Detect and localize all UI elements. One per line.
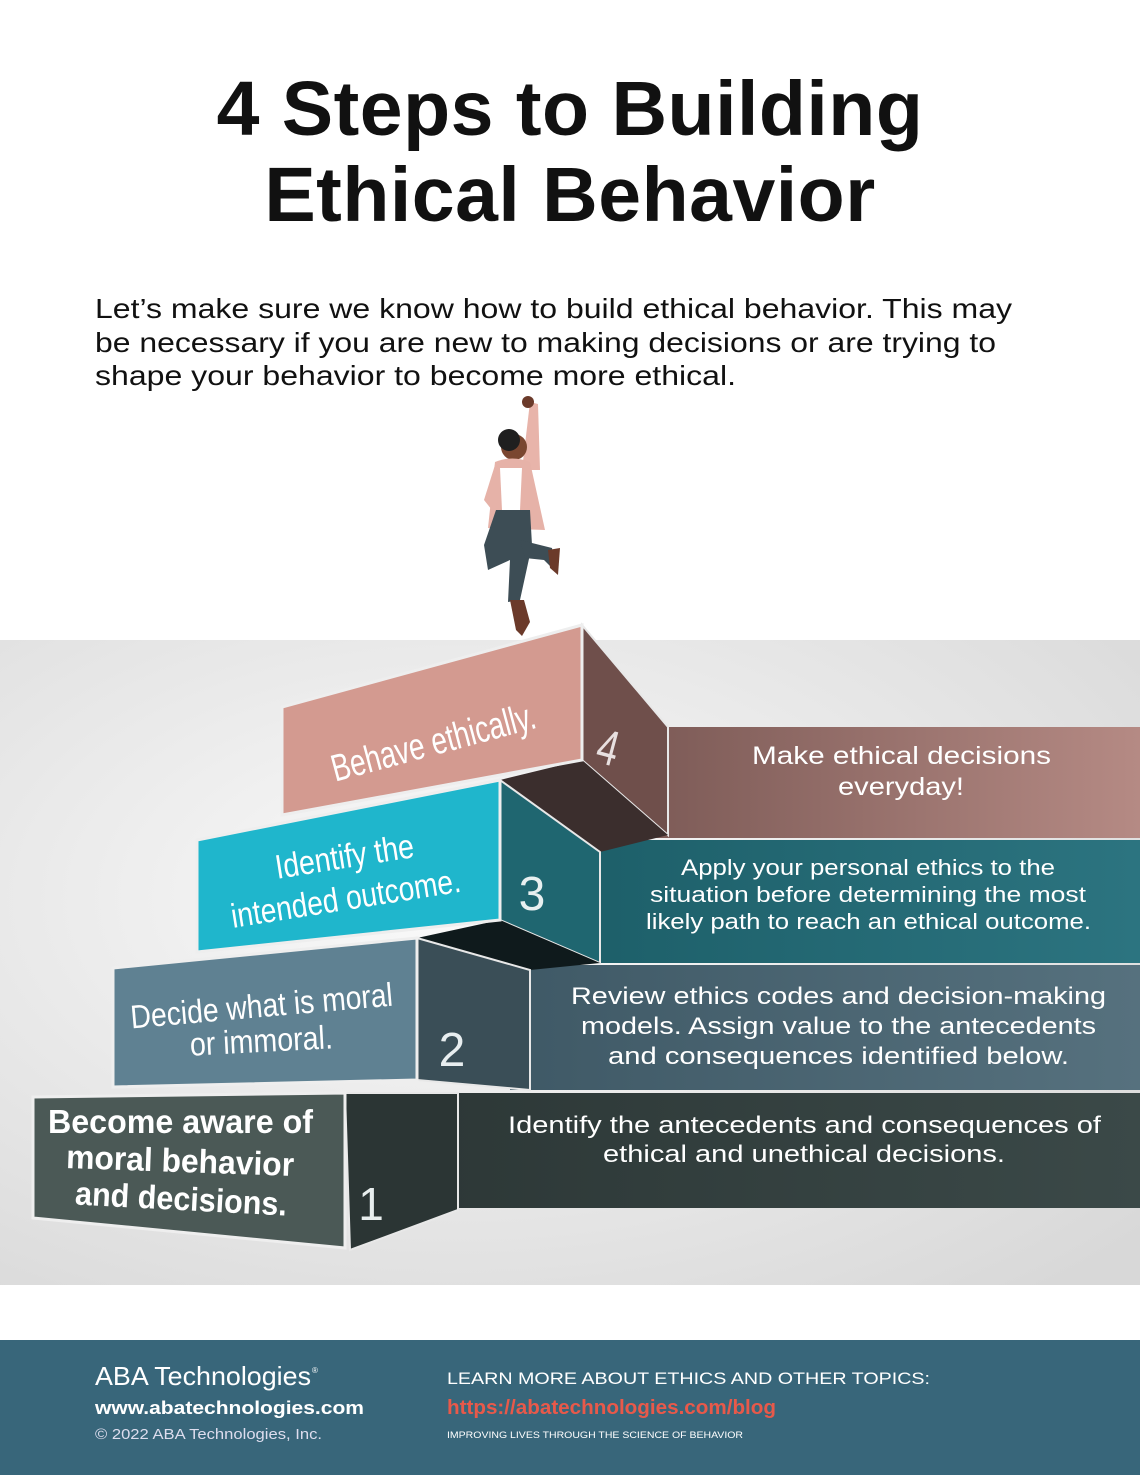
band 4: [640, 727, 1140, 838]
block 1: and decisions.: [74, 1175, 288, 1223]
intro text: shape your behavior to become more ethical.: [95, 360, 736, 391]
block 1: 1: [358, 1178, 384, 1230]
band 2: Review ethics codes and decision-making: [571, 983, 1106, 1010]
block 1: moral behavior: [66, 1138, 295, 1183]
band 2: models. Assign value to the antecedents: [581, 1013, 1096, 1040]
band 3: Apply your personal ethics to the: [681, 855, 1055, 880]
block 4: Behave ethically.: [327, 696, 540, 790]
icon: jumping woman: [484, 396, 560, 636]
block 2: or immoral.: [189, 1018, 334, 1063]
intro text: [95, 293, 1012, 391]
block 1: [33, 1093, 458, 1250]
footer: copyright: © 2022 ABA Technologies, Inc.: [95, 1426, 322, 1443]
footer: tagline: IMPROVING LIVES THROUGH THE SCIENCE OF BEHAVIOR: [447, 1430, 744, 1440]
band 3: situation before determining the most: [650, 882, 1086, 907]
band 1: [440, 1093, 1140, 1208]
staircase graphic: [0, 396, 1140, 1285]
band 4: Make ethical decisions: [752, 742, 1051, 770]
band 2: and consequences identified below.: [608, 1043, 1069, 1070]
block 3: Identify the: [272, 827, 417, 887]
footer: website: www.abatechnologies.com: [94, 1398, 364, 1418]
block 3: 3: [519, 868, 545, 921]
intro text: be necessary if you are new to making decisions or are trying to: [95, 327, 996, 358]
band 3: likely path to reach an ethical outcome.: [646, 909, 1091, 934]
block 1: Become aware of: [48, 1103, 314, 1140]
block 2: 2: [439, 1024, 465, 1077]
band 1: Identify the antecedents and consequences of: [508, 1112, 1101, 1139]
block 2: [113, 938, 530, 1090]
footer: ®: [312, 1366, 318, 1375]
block 4: 4: [591, 719, 625, 778]
block 4: [282, 625, 668, 852]
band 1: ethical and unethical decisions.: [603, 1141, 1005, 1168]
title: Ethical Behavior: [264, 152, 876, 238]
block 2: Decide what is moral: [129, 976, 394, 1035]
block 3: intended outcome.: [228, 862, 463, 936]
footer: brand: ABA Technologies: [95, 1361, 311, 1391]
band 3: [580, 840, 1140, 963]
title: 4 Steps to Building: [217, 66, 923, 152]
title: [217, 66, 923, 238]
intro text: Let’s make sure we know how to build ethical behavior. This may: [95, 293, 1012, 324]
footer: learn more: LEARN MORE ABOUT ETHICS AND OTHER TOPICS:: [447, 1369, 930, 1388]
footer: link: https://abatechnologies.com/blog: [447, 1397, 776, 1419]
block 3: [197, 780, 600, 970]
band 4: everyday!: [838, 773, 964, 801]
band 2: [510, 965, 1140, 1090]
footer: [0, 1340, 1140, 1475]
